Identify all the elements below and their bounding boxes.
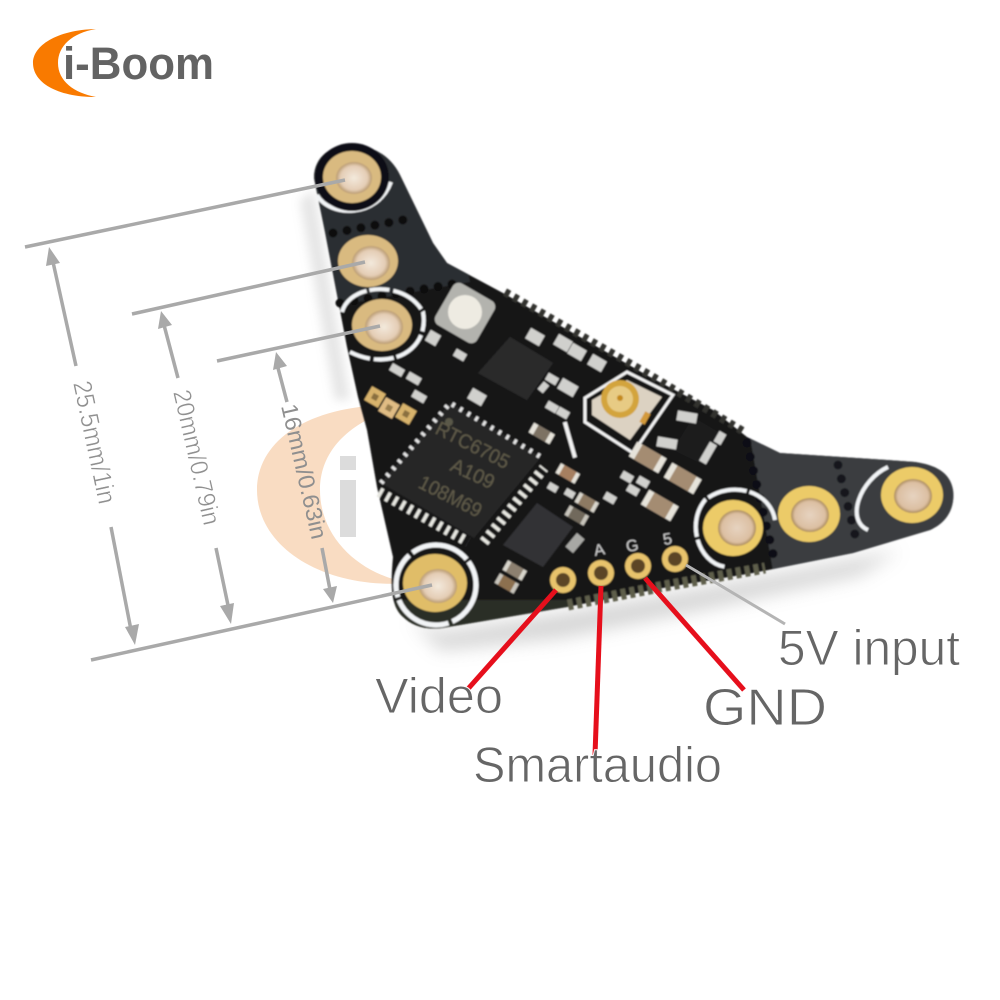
via rows [333, 219, 858, 562]
vtx circuit board [300, 130, 980, 640]
mounting hole 1 [315, 143, 389, 211]
main chip RTC6705 [381, 403, 541, 538]
pad labels: 5 [662, 531, 674, 549]
capacitors [494, 423, 702, 594]
label: 16mm/0.63in: 16mm/0.63in [276, 401, 333, 542]
label: GND: GND [703, 679, 827, 737]
small white components [389, 328, 726, 504]
logo: i-Boom [33, 29, 214, 97]
dimension line: top mounting [25, 180, 345, 247]
label: 20mm/0.79in: 20mm/0.79in [167, 387, 225, 528]
red leader: GND [645, 578, 744, 690]
top edge castellations [505, 292, 746, 433]
silkscreen rings [317, 182, 888, 625]
label: 25.5mm/1in: 25.5mm/1in [67, 378, 122, 507]
board outline [314, 145, 953, 628]
dimension line: third mounting [217, 326, 380, 361]
label: Video: Video [375, 668, 503, 724]
arrow: 16mm [273, 352, 337, 603]
pcb shadow [410, 550, 900, 650]
mounting hole 2 [338, 235, 398, 287]
arrow: 20mm [158, 311, 234, 624]
push button [432, 280, 498, 346]
dimension line: bottom mounting [91, 585, 432, 660]
mounting hole 6 [778, 486, 840, 542]
board arm tints [314, 150, 954, 629]
watermark logo [257, 405, 410, 584]
mounting hole 4 [403, 554, 467, 612]
antenna connector [585, 372, 673, 453]
mounting hole 3 [352, 299, 412, 351]
third chip [503, 503, 573, 567]
LEDs [364, 386, 417, 425]
main chip RTC6705: A109 [447, 455, 498, 494]
grey leader: 5V input [686, 565, 785, 624]
second chip [478, 337, 553, 400]
red leader: Smartaudio [595, 586, 601, 755]
arm side shadow [300, 190, 350, 400]
main chip RTC6705: RTC6705 [432, 418, 513, 474]
dimension line: second mounting [132, 262, 365, 314]
arrow: 25.5mm [46, 247, 139, 645]
label: Smartaudio: Smartaudio [473, 737, 722, 793]
pad labels: G [625, 537, 640, 556]
signal pads [550, 546, 688, 593]
red leader: Video [467, 590, 556, 690]
main chip RTC6705: 108M69 [415, 472, 485, 522]
logo: i-Boom: i-Boom [63, 38, 214, 89]
mounting hole 7 [881, 467, 943, 523]
pad labels: A [593, 541, 607, 560]
pad labels [593, 531, 674, 560]
fourth chip [673, 417, 720, 463]
label: 5V input: 5V input [778, 620, 960, 676]
mounting hole 5 [703, 500, 763, 556]
bottom edge castellations [568, 568, 765, 605]
chip pins [379, 468, 544, 542]
